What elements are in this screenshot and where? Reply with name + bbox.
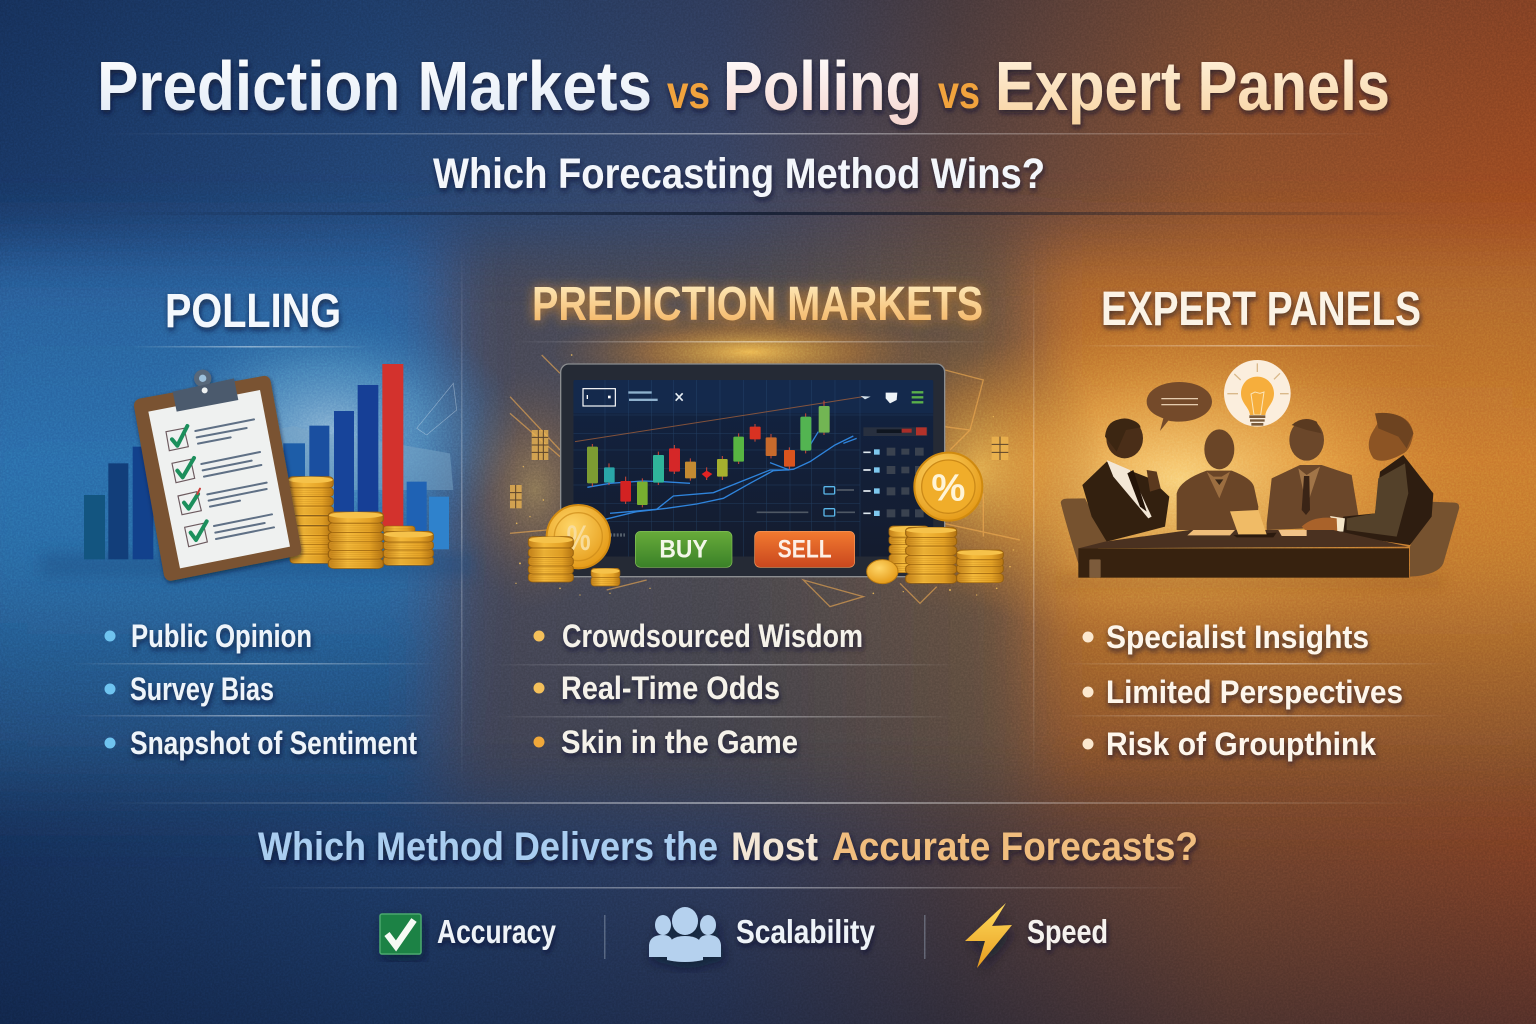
title: Expert Panels: [995, 47, 1390, 125]
button: sell: [755, 531, 855, 567]
bottom question: Accurate Forecasts?: [832, 825, 1198, 869]
bottom question: [258, 825, 1198, 869]
list: polling bullets: Public Opinion: [131, 618, 312, 654]
metric: scalability: [649, 907, 876, 962]
illustration: clipboard, bar chart and coins: [40, 364, 473, 581]
chairs: [1061, 498, 1459, 577]
icon: lightning bolt: [965, 903, 1012, 968]
metric: speed: Speed: [1027, 913, 1108, 950]
list: polling bullets: Snapshot of Sentiment: [130, 725, 417, 761]
panel: polling: [40, 285, 473, 761]
expert 4: [1302, 413, 1433, 545]
heading: expert panels: EXPERT PANELS: [1101, 283, 1421, 336]
expert 1: [1082, 418, 1169, 542]
list: expert panels bullets: Specialist Insights: [1106, 619, 1369, 655]
coin stacks: [288, 477, 433, 568]
button: buy: [635, 531, 732, 567]
button: buy: BUY: [659, 535, 708, 563]
heading: polling: POLLING: [165, 285, 341, 338]
icon: green check: [380, 914, 421, 954]
list: prediction markets bullets: [490, 618, 960, 760]
list: polling bullets: Survey Bias: [130, 671, 274, 707]
sparkles: [515, 354, 1014, 596]
speech bubble: [1147, 382, 1212, 431]
list: expert panels bullets: Risk of Groupthink: [1106, 726, 1376, 762]
panel: prediction markets: [490, 278, 1020, 760]
expert 2: [1177, 429, 1258, 530]
metric: scalability: Scalability: [736, 913, 876, 950]
list: prediction markets bullets: Crowdsourced Wisdom: [562, 618, 863, 654]
metric: accuracy: [380, 913, 557, 954]
metric: speed: [965, 903, 1108, 968]
icon: right percent coin and coins: [867, 453, 1003, 584]
illustration: trading screen: [510, 354, 1020, 607]
icon: people: [649, 907, 721, 962]
subtitle: Which Forecasting Method Wins?: [433, 150, 1045, 198]
screen: [573, 380, 933, 557]
laptop: [1230, 510, 1267, 534]
button: sell: SELL: [778, 535, 832, 563]
icon: left percent coin and coins: [528, 505, 620, 586]
icon: left percent coin and coins: %: [567, 519, 591, 558]
title: Prediction Markets: [97, 47, 652, 125]
table: [1078, 530, 1409, 578]
panel: expert panels: [1057, 283, 1459, 762]
title: [97, 47, 1390, 125]
clipboard: [134, 370, 301, 581]
title: vs: [667, 66, 710, 118]
list: expert panels bullets: Limited Perspectives: [1106, 674, 1403, 710]
side panel widgets: [610, 427, 927, 535]
expert 3: [1267, 419, 1358, 530]
candlesticks: [587, 401, 830, 507]
list: expert panels bullets: [1060, 619, 1450, 762]
list: polling bullets: [70, 618, 440, 761]
heading: prediction markets: PREDICTION MARKETS: [532, 278, 983, 331]
title: Polling: [723, 47, 922, 125]
metric: accuracy: Accuracy: [437, 913, 557, 950]
list: prediction markets bullets: Skin in the Game: [561, 724, 798, 760]
list: prediction markets bullets: Real-Time Odds: [561, 670, 780, 706]
icon: light bulb: [1224, 360, 1291, 427]
bars: [84, 364, 449, 559]
bottom question: Which Method Delivers the: [258, 825, 718, 869]
bottom question: Most: [731, 825, 818, 869]
monitor frame: [561, 364, 945, 577]
blue trend lines: [587, 432, 857, 519]
title: vs: [938, 66, 980, 118]
icon: right percent coin and coins: %: [931, 467, 965, 510]
illustration: experts around a table: [1057, 360, 1459, 585]
